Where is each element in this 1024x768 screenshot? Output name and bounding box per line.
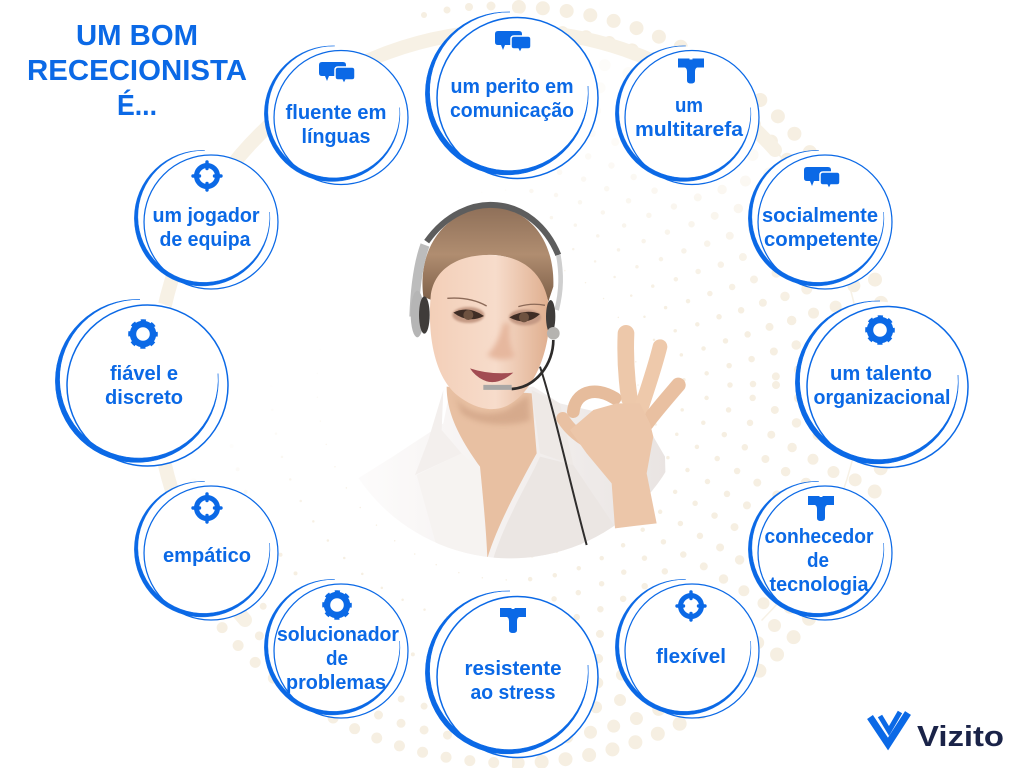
panel: um perito em comunicação: um perito em bbox=[450, 76, 574, 98]
logo: Vizito: Vizito bbox=[917, 721, 1004, 753]
photo: receptionist with headset making OK gesture bbox=[350, 205, 678, 590]
panel: solucionador de problemas: problemas bbox=[286, 672, 386, 694]
facial features bbox=[447, 298, 545, 382]
panel: um jogador de equipa bbox=[134, 150, 278, 289]
panel: resistente ao stress bbox=[425, 591, 598, 758]
panel: resistente ao stress: resistente bbox=[464, 658, 562, 680]
face bbox=[430, 255, 550, 409]
hand making OK sign bbox=[563, 333, 678, 528]
panel: flexível: flexível bbox=[656, 646, 726, 668]
title bbox=[27, 20, 247, 122]
panel: fiável e discreto: fiável e bbox=[110, 363, 178, 385]
panel: conhecedor de tecnologia bbox=[748, 481, 892, 620]
panel: resistente ao stress: ao stress bbox=[470, 682, 556, 704]
title: UM BOM bbox=[76, 20, 198, 52]
panel: empático bbox=[134, 481, 278, 620]
panel: um jogador de equipa: de equipa bbox=[160, 229, 251, 251]
panel: fluente em línguas bbox=[264, 46, 408, 184]
panel: fluente em línguas: línguas bbox=[302, 126, 370, 148]
panel: fiável e discreto: discreto bbox=[105, 387, 183, 409]
panel: socialmente competente: socialmente bbox=[762, 205, 878, 227]
panel: um perito em comunicação bbox=[425, 12, 598, 178]
title: É... bbox=[117, 88, 157, 122]
logo: Vizito bbox=[870, 712, 1004, 753]
panel: um multitarefa bbox=[615, 46, 759, 184]
panel: solucionador de problemas: de bbox=[326, 648, 348, 670]
panel: solucionador de problemas bbox=[264, 579, 408, 718]
panel: um talento organizacional: um talento bbox=[830, 363, 932, 385]
background beige ring bbox=[156, 31, 862, 620]
hair bbox=[422, 207, 553, 302]
panel: um talento organizacional bbox=[795, 301, 968, 468]
title: RECECIONISTA bbox=[27, 55, 247, 87]
panel: fluente em línguas: fluente em bbox=[286, 102, 386, 124]
panel: socialmente competente: competente bbox=[764, 229, 878, 251]
panel: um jogador de equipa: um jogador bbox=[152, 205, 260, 227]
panel: um multitarefa: multitarefa bbox=[635, 119, 744, 141]
panel: um multitarefa: um bbox=[675, 95, 703, 117]
panel: fiável e discreto bbox=[55, 299, 228, 466]
panel: conhecedor de tecnologia: conhecedor bbox=[764, 526, 874, 548]
panel: conhecedor de tecnologia: tecnologia bbox=[770, 574, 869, 596]
panel: um talento organizacional: organizacional bbox=[814, 387, 950, 409]
background dot pattern bbox=[216, 0, 888, 768]
panel: socialmente competente bbox=[748, 150, 892, 289]
panel: flexível bbox=[615, 579, 759, 718]
headset bbox=[411, 205, 587, 545]
panel: conhecedor de tecnologia: de bbox=[807, 550, 829, 572]
panel: empático: empático bbox=[163, 545, 251, 567]
panel: um perito em comunicação: comunicação bbox=[450, 100, 574, 122]
panel: solucionador de problemas: solucionador bbox=[277, 624, 399, 646]
